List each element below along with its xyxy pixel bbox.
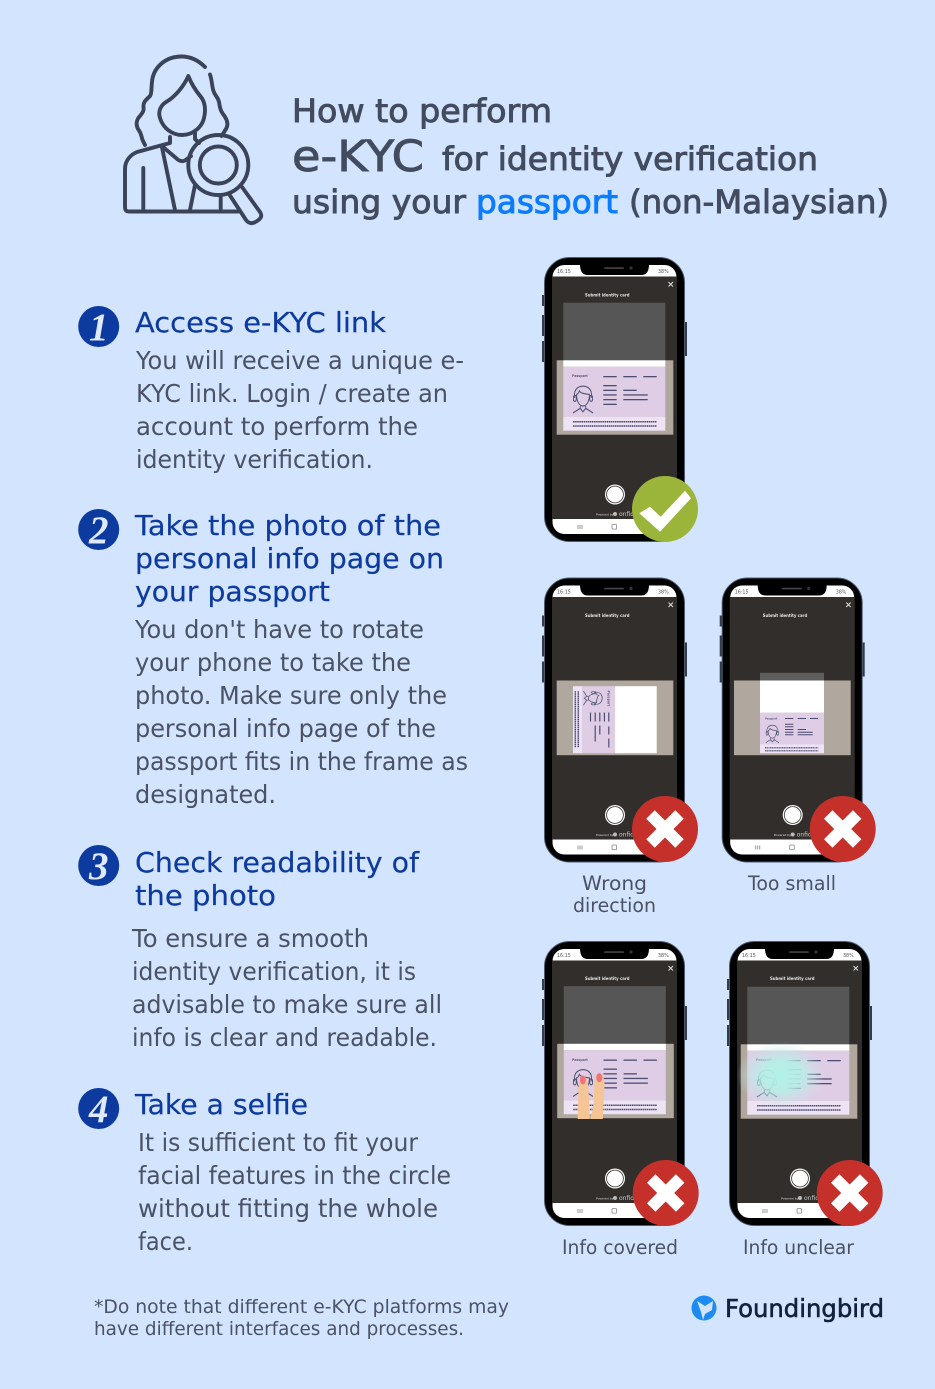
phone: info covered: Passport [572, 1058, 588, 1062]
title: e-KYC [292, 132, 424, 182]
captions [562, 872, 855, 1259]
icon: red cross badge [632, 796, 698, 862]
step 2 heading [134, 509, 444, 608]
phone: info unclear [727, 942, 883, 1226]
phone: too small: 38% [836, 590, 847, 596]
captions: Wrong [582, 872, 647, 895]
step 2 body: designated. [135, 780, 276, 809]
title: How to perform [292, 92, 552, 130]
phone: too small: onfido [797, 832, 816, 838]
phone: wrong direction [542, 578, 698, 862]
captions: Info unclear [743, 1236, 855, 1259]
step 2 heading: Take the photo of the [134, 509, 441, 542]
footnote: *Do note that different e-KYC platforms may [94, 1296, 509, 1318]
step 4 heading: Take a selfie [134, 1088, 308, 1121]
step 4 body: without fitting the whole [138, 1194, 438, 1223]
step 3 number badge: 3 [88, 845, 108, 888]
captions: Too small [747, 872, 836, 895]
step 3 body: info is clear and readable. [132, 1023, 437, 1052]
step 3 number badge [78, 845, 119, 888]
phone: wrong direction: 38% [658, 590, 669, 596]
phone: correct passport photo [542, 258, 698, 542]
phone: wrong direction: Submit identity card [585, 613, 630, 619]
step 4 number badge [78, 1088, 119, 1131]
phone: too small [720, 578, 876, 862]
title: for identity verification [442, 140, 818, 178]
logo: Foundingbird: Foundingbird [725, 1294, 884, 1323]
phone: correct passport photo: Submit identity card [585, 292, 630, 298]
step 3 body: To ensure a smooth [131, 924, 369, 953]
step 4 number badge: 4 [88, 1088, 108, 1131]
phone: wrong direction: onfido [619, 832, 638, 838]
phone: info unclear: Powered by [781, 1196, 799, 1200]
step 4 [78, 1088, 451, 1256]
step 1 body: identity verification. [136, 445, 373, 474]
phone: info covered: Powered by [596, 1196, 614, 1200]
step 2 heading: personal info page on [135, 542, 444, 575]
step 2 body: photo. Make sure only the [135, 681, 447, 710]
phone: too small: Passport [765, 716, 778, 720]
title: passport [476, 183, 618, 221]
step 1 [78, 306, 464, 474]
phone: wrong direction: 16:15 [557, 590, 571, 596]
phone: correct passport photo: onfido [619, 511, 638, 518]
phone: info covered [542, 942, 699, 1226]
step 3 [78, 845, 442, 1052]
step 1 body: account to perform the [136, 412, 418, 441]
phone: too small: 16:15 [735, 590, 749, 596]
step 3 heading [135, 846, 420, 912]
step 2 body [134, 615, 468, 809]
phone: correct passport photo: 38% [658, 269, 669, 275]
step 2 body: passport fits in the frame as [135, 747, 468, 776]
glare on passport [737, 1042, 825, 1108]
step 4 body: It is sufficient to fit your [138, 1128, 419, 1157]
step 3 body [131, 924, 442, 1052]
phone: info unclear: 38% [843, 953, 854, 959]
phone: info unclear: 16:15 [742, 953, 756, 959]
step 1 number badge [78, 306, 119, 349]
phone: info unclear: onfido [804, 1195, 823, 1202]
title [292, 92, 889, 221]
step 2 body: personal info page of the [135, 714, 436, 743]
phone: correct passport photo: Powered by [596, 512, 614, 516]
step 2 number badge: 2 [88, 509, 108, 552]
phone: wrong direction: Powered by [596, 833, 614, 837]
phone: info covered: 16:15 [557, 953, 571, 959]
step 1 body: You will receive a unique e- [135, 346, 464, 375]
phone: too small: Submit identity card [763, 613, 807, 619]
step 3 heading: the photo [135, 879, 276, 912]
phone: info unclear: Submit identity card [770, 976, 814, 982]
step 1 body: KYC link. Login / create an [136, 379, 448, 408]
step 3 heading: Check readability of [135, 846, 420, 879]
phone: too small: Powered by [774, 833, 791, 837]
footnote: have different interfaces and processes. [94, 1318, 464, 1340]
step 1 body [135, 346, 464, 474]
step 2 body: You don't have to rotate [134, 615, 424, 644]
step 1 number badge: 1 [89, 306, 108, 349]
step 2 body: your phone to take the [135, 648, 411, 677]
title: using your [292, 183, 467, 221]
phone: info covered: Submit identity card [585, 976, 630, 982]
step 3 body: advisable to make sure all [132, 990, 442, 1019]
step 2 [78, 509, 468, 809]
step 4 body: face. [138, 1227, 193, 1256]
fingers covering the passport [578, 1073, 604, 1119]
title: (non-Malaysian) [629, 183, 889, 221]
step 4 body: facial features in the circle [138, 1161, 451, 1190]
icon: green check badge [632, 476, 698, 542]
phone: correct passport photo: Passport [572, 374, 588, 378]
icon: red cross badge [810, 796, 876, 862]
phone: info covered: 38% [658, 953, 669, 959]
phone: wrong direction: Passport [606, 690, 610, 707]
step 3 body: identity verification, it is [132, 957, 416, 986]
step 2 heading: your passport [135, 575, 330, 608]
step 1 heading: Access e-KYC link [135, 306, 387, 339]
icon: bird in circle [692, 1296, 716, 1320]
captions: Info covered [562, 1236, 678, 1259]
step 4 body [138, 1128, 451, 1256]
captions: direction [573, 894, 656, 917]
phone: info covered: onfido [619, 1195, 638, 1202]
phone: correct passport photo: 16:15 [557, 269, 571, 275]
icon: red cross badge [633, 1160, 699, 1226]
phone: info unclear: Passport [756, 1058, 772, 1062]
icon: red cross badge [817, 1160, 883, 1226]
icon: woman with magnifying glass [125, 56, 261, 223]
step 2 number badge [78, 509, 119, 552]
footnote [94, 1296, 509, 1340]
